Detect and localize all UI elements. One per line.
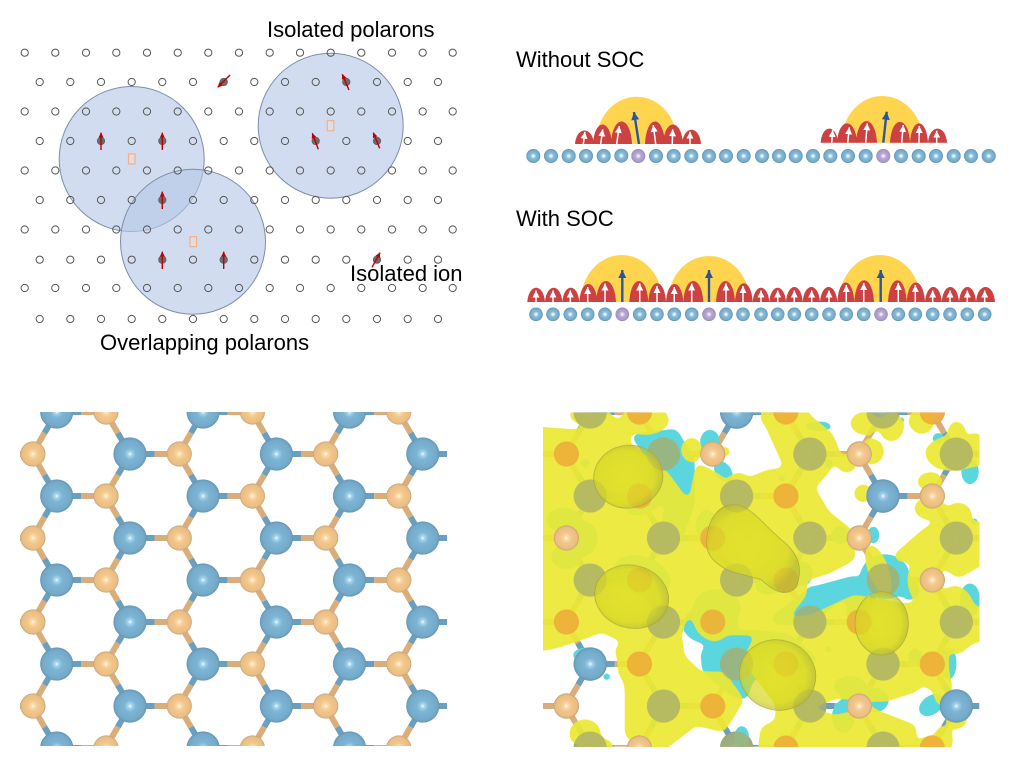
blue spin arrows: [634, 112, 887, 144]
charge density domes: [581, 255, 921, 302]
cyan isosurface: [546, 415, 980, 750]
spin atoms: [97, 78, 381, 264]
uncovered atoms: [554, 395, 973, 760]
panel: charge density isosurface: [543, 412, 980, 747]
lattice sites: [21, 49, 456, 323]
large isosurface lobes: [587, 440, 908, 719]
red charge lobes: [527, 280, 995, 302]
label: isolated ion: Isolated ion: [350, 261, 463, 286]
red charge lobes: [575, 121, 947, 144]
polaron centre markers: [128, 121, 334, 247]
blue spin arrows: [622, 270, 881, 302]
spin arrows: [101, 74, 380, 269]
yellow isosurface: [543, 412, 980, 747]
label: overlapping polarons: Overlapping polarons: [100, 330, 309, 355]
panel: with SOC: [516, 206, 995, 321]
white spin arrows: [583, 123, 937, 144]
label: isolated polarons: Isolated polarons: [267, 17, 435, 42]
panel: polaron lattice schematic: [21, 17, 463, 355]
white spin arrows: [536, 283, 985, 302]
panel: without SOC: [516, 47, 996, 163]
heading: with SOC: With SOC: [516, 206, 614, 231]
heading: without SOC: Without SOC: [516, 47, 644, 72]
panel: honeycomb crystal structure: [20, 412, 447, 746]
polaron circles: [59, 53, 403, 314]
atom chain: [529, 308, 992, 321]
charge density domes: [596, 96, 923, 144]
atom chain: [526, 149, 996, 163]
atoms seen through the isosurface: [554, 412, 973, 747]
